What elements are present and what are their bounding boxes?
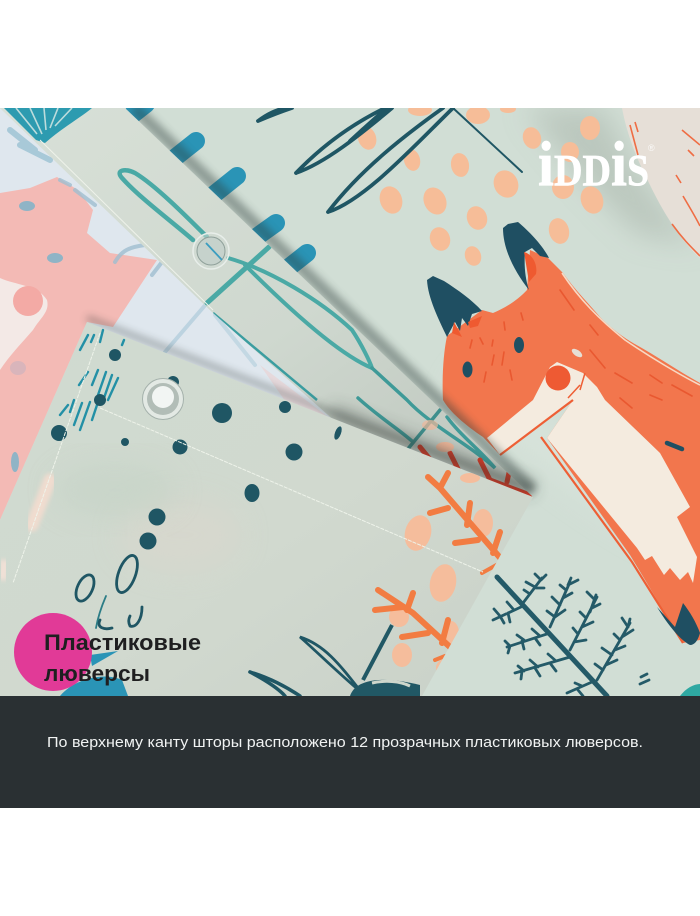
hem stitch — [40, 140, 213, 310]
magenta label circle — [14, 613, 92, 691]
caption band — [0, 696, 700, 808]
fox left ear — [427, 276, 482, 337]
pink circle — [13, 286, 43, 316]
red branch on hem — [420, 447, 530, 495]
fox mouth marks — [568, 373, 585, 398]
teal loops — [120, 170, 495, 468]
fox nose — [546, 366, 570, 390]
fox back highlight — [562, 273, 700, 385]
hem grommet — [192, 232, 230, 270]
teal edge line — [213, 313, 317, 400]
registered mark: ® — [648, 143, 655, 153]
fox right ear — [503, 222, 549, 290]
blue leaf behind label — [60, 677, 128, 696]
fox white spot — [572, 348, 582, 358]
caption text: По верхнему канту шторы расположено 12 прозрачных пластиковых люверсов. — [47, 734, 643, 751]
fox fur dashes — [470, 290, 692, 408]
back curtain cloth — [0, 108, 700, 696]
fox side marks — [667, 443, 682, 449]
white patch — [0, 278, 48, 370]
fox body — [443, 250, 700, 643]
blue leaf strokes — [132, 104, 307, 268]
fox white muzzle and belly — [487, 362, 697, 583]
teal hatching corner — [60, 330, 124, 430]
peach dots pattern — [354, 104, 607, 268]
middle hem band — [0, 108, 533, 497]
dark rabbit shape — [350, 625, 420, 696]
dark leaf outlines — [258, 108, 522, 212]
fox inner ear marks — [452, 252, 536, 337]
label heading — [44, 630, 201, 686]
hem shadow on back cloth — [134, 108, 533, 490]
fox eyes — [462, 337, 524, 378]
pale blue marks — [10, 130, 255, 365]
pale blue dots — [10, 201, 63, 472]
peach dots on hem — [422, 420, 454, 452]
curtain photo — [0, 104, 700, 696]
small loops and marks — [72, 553, 362, 696]
see-through left cloth — [0, 108, 345, 520]
front stitches — [13, 333, 483, 583]
dark dots — [51, 349, 343, 550]
iDDiS logo: iDDiS — [538, 128, 649, 199]
back tree — [493, 574, 649, 696]
teal leaf corner — [680, 684, 700, 696]
teal hatching top left — [4, 108, 92, 143]
label heading: люверсы — [44, 661, 150, 686]
shade at lower see-through — [260, 366, 326, 416]
soft stains — [120, 499, 240, 571]
front cloth shadow — [87, 318, 533, 490]
front cloth corner — [0, 322, 533, 696]
top right white animal — [622, 108, 700, 258]
orange branches — [375, 473, 502, 660]
label heading: Пластиковые — [44, 630, 201, 655]
peach dots on front — [389, 473, 493, 677]
fox illustration — [427, 222, 700, 645]
fox red outline — [500, 400, 683, 643]
pink blob — [0, 177, 157, 520]
fox tail tip — [657, 603, 700, 645]
front grommet — [142, 378, 184, 420]
